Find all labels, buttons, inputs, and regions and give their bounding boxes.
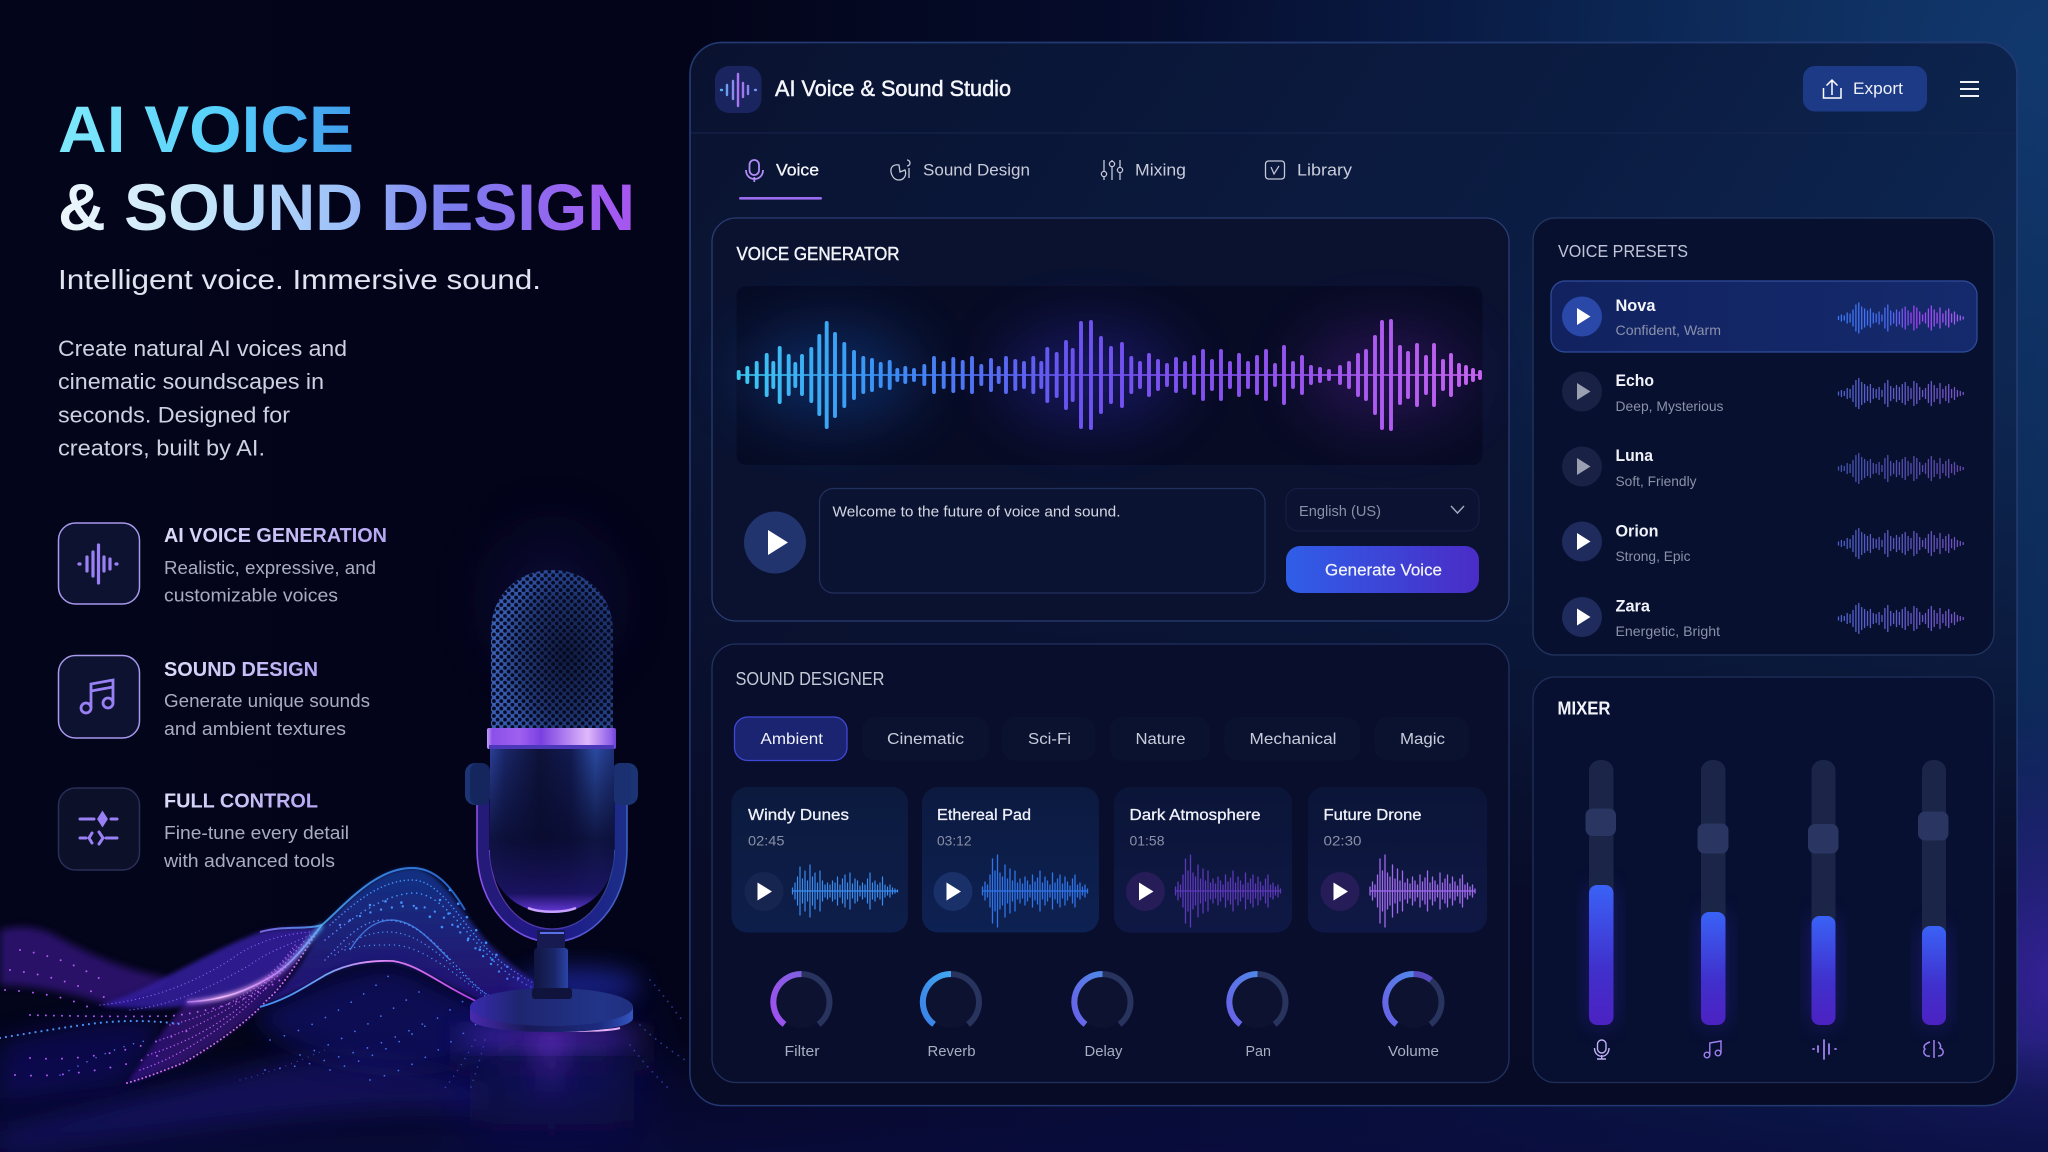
generate button <box>1286 546 1479 593</box>
knob: Filter: Filter <box>784 1043 820 1060</box>
intro text: cinematic soundscapes in <box>58 369 324 394</box>
preset: Nova <box>1551 281 1977 352</box>
sound card: Dark Atmosphere: 01:58 <box>1130 832 1165 848</box>
feature heading: SOUND DESIGN <box>164 659 318 681</box>
particle sound wave <box>0 868 685 1150</box>
sound card: Ethereal Pad: 03:12 <box>937 832 972 848</box>
hill mesh dots <box>325 880 540 1008</box>
knob: Volume <box>1385 974 1442 1060</box>
preset: Luna <box>1562 446 1963 489</box>
intro text: seconds. Designed for <box>58 402 290 428</box>
fader: output <box>1918 760 1948 1058</box>
feature heading: FULL CONTROL <box>164 790 318 812</box>
sound card: Future Drone: 02:30 <box>1324 832 1362 848</box>
feature text: customizable voices <box>164 584 338 606</box>
tabs <box>739 160 1353 200</box>
generate button: Generate Voice <box>1325 562 1442 580</box>
preset: Zara: Zara <box>1616 596 1651 616</box>
purple mesh dots <box>5 927 320 1083</box>
microphone illustration <box>461 530 641 1152</box>
intro text <box>58 336 347 460</box>
knob: Delay <box>1074 974 1131 1060</box>
blue floor dots <box>0 975 685 1090</box>
app panel <box>690 42 2017 1106</box>
knob: Pan: Pan <box>1246 1043 1271 1060</box>
hero title: AI VOICE <box>58 92 354 166</box>
hero title <box>58 92 635 244</box>
sound card: Ethereal Pad: Ethereal Pad <box>937 807 1031 824</box>
logo <box>715 66 762 113</box>
knob: Pan <box>1229 974 1286 1060</box>
preset: Orion: Orion <box>1616 522 1658 540</box>
fader: voice <box>1586 760 1616 1059</box>
category chips: Cinematic <box>887 731 964 748</box>
fader: waveform <box>1808 760 1838 1059</box>
language dropdown <box>1286 488 1479 531</box>
sound card: Windy Dunes: 02:45 <box>748 832 785 848</box>
tab: voice: Voice <box>776 160 819 180</box>
menu icon <box>1960 82 1979 96</box>
tab: voice <box>739 160 822 200</box>
heading: VOICE GENERATOR <box>736 244 900 264</box>
preset: Luna: Luna <box>1616 446 1654 465</box>
panel: sound designer <box>712 644 1509 1082</box>
microphone glowing band <box>487 728 616 749</box>
language dropdown: English (US) <box>1299 503 1381 520</box>
feature text: Fine-tune every detail <box>164 822 349 843</box>
feature text: Realistic, expressive, and <box>164 557 376 578</box>
floor reflection <box>461 967 641 1152</box>
tab: mixing: Mixing <box>1135 160 1186 180</box>
category chips: Magic <box>1400 731 1445 748</box>
icon: waveform tile <box>58 523 140 604</box>
sound card: Future Drone: Future Drone <box>1324 807 1422 824</box>
export button: Export <box>1853 79 1903 98</box>
panel: voice presets <box>1533 218 1994 655</box>
feature: full control <box>58 788 349 871</box>
feature heading: AI VOICE GENERATION <box>164 525 387 547</box>
feature text <box>164 690 370 739</box>
text input <box>820 488 1265 593</box>
panel: mixer <box>1533 677 1994 1082</box>
feature text: and ambient textures <box>164 718 346 739</box>
category chips: Mechanical <box>1250 731 1336 748</box>
category chips: Nature <box>1136 731 1186 748</box>
preset: Luna: Soft, Friendly <box>1616 473 1696 489</box>
feature text <box>164 557 376 606</box>
heading: SOUND DESIGNER <box>736 669 884 689</box>
microphone body <box>490 749 614 913</box>
intro text: creators, built by AI. <box>58 436 265 460</box>
fader: music <box>1698 760 1728 1058</box>
preset: Orion <box>1562 522 1963 564</box>
icon: music note tile <box>58 656 140 738</box>
preset: Echo: Echo <box>1616 371 1654 390</box>
preset: Nova: Confident, Warm <box>1616 322 1721 338</box>
hero title: & SOUND DESIGN <box>58 170 635 244</box>
sound card: Dark Atmosphere: Dark Atmosphere <box>1130 807 1261 824</box>
app title: AI Voice & Sound Studio <box>775 76 1011 101</box>
sound card: Ethereal Pad <box>922 787 1099 932</box>
heading: VOICE PRESETS <box>1558 241 1688 261</box>
knob: Filter <box>773 974 830 1060</box>
microphone grille <box>491 570 613 728</box>
tab: mixing <box>1101 160 1186 180</box>
knob: Reverb <box>923 974 979 1060</box>
waveform display <box>736 286 1482 465</box>
preset: Echo: Deep, Mysterious <box>1616 398 1724 414</box>
panel: voice generator <box>712 218 1509 621</box>
microphone side knobs <box>465 763 638 805</box>
play button <box>744 512 806 574</box>
preset: Orion: Strong, Epic <box>1616 548 1690 564</box>
knob: Reverb: Reverb <box>928 1043 976 1060</box>
icon: sliders tile <box>58 788 140 870</box>
heading: MIXER <box>1558 698 1610 718</box>
microphone stand <box>470 930 633 1032</box>
feature text <box>163 822 349 871</box>
knob: Delay: Delay <box>1084 1043 1123 1060</box>
preset: Zara: Energetic, Bright <box>1616 623 1720 639</box>
hill crest rim <box>260 868 465 932</box>
intro text: Create natural AI voices and <box>58 336 347 361</box>
sound card: Windy Dunes <box>732 787 908 932</box>
feature text: Generate unique sounds <box>164 690 370 711</box>
preset: Echo <box>1562 371 1963 414</box>
tab: library <box>1266 160 1353 180</box>
preset: Nova: Nova <box>1616 296 1656 315</box>
feature: AI voice generation <box>58 523 387 606</box>
text input: Welcome to the future of voice and sound. <box>832 504 1120 520</box>
sound card: Windy Dunes: Windy Dunes <box>748 807 849 824</box>
feature text: with advanced tools <box>163 850 335 871</box>
tab: sound design: Sound Design <box>923 160 1030 180</box>
category chips: Sci-Fi <box>1028 731 1071 748</box>
sound card: Dark Atmosphere <box>1114 787 1292 932</box>
knob: Volume: Volume <box>1388 1043 1439 1060</box>
preset: Zara <box>1562 596 1963 639</box>
export button <box>1803 66 1927 112</box>
tab: library: Library <box>1297 160 1353 180</box>
glowing wave lines <box>187 925 480 1007</box>
category chips <box>734 717 1469 760</box>
feature: sound design <box>58 656 370 739</box>
app header <box>691 66 2016 133</box>
subtitle: Intelligent voice. Immersive sound. <box>58 264 541 295</box>
microphone yoke <box>477 790 627 942</box>
sound card: Future Drone <box>1308 787 1487 932</box>
category chips: Ambient <box>760 731 824 748</box>
